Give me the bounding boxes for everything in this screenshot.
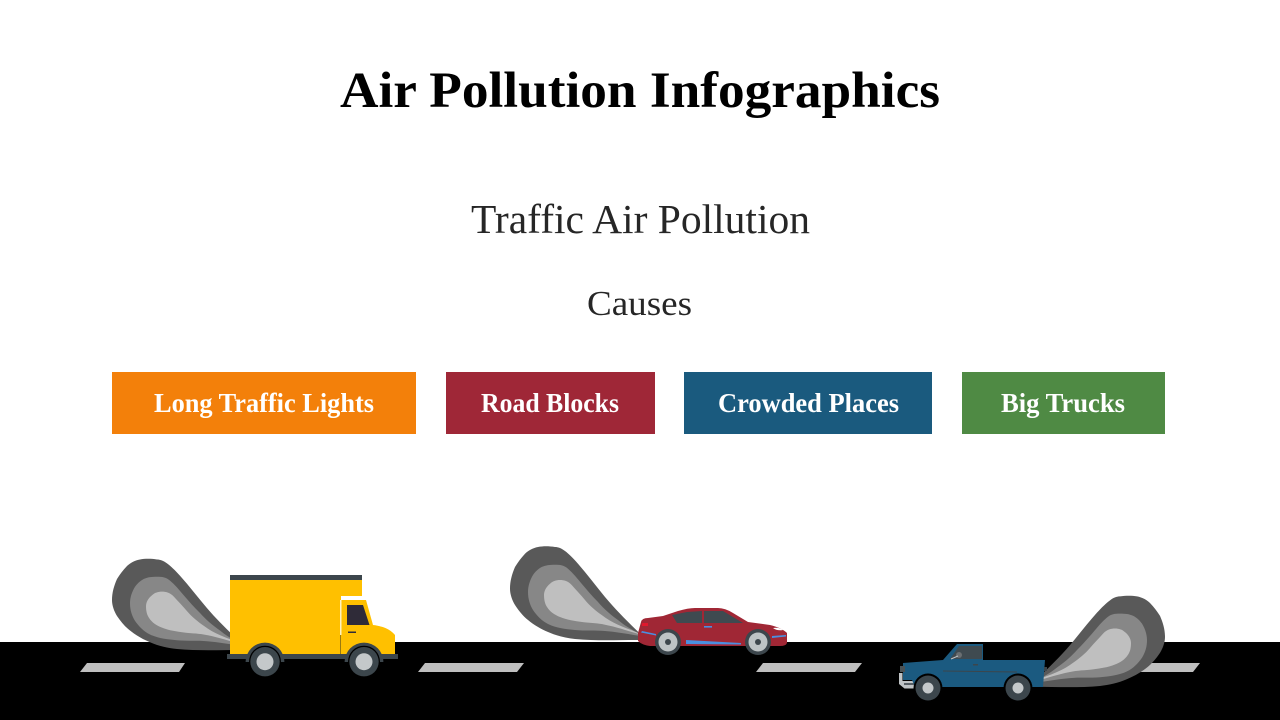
smoke cloud: truck <box>112 559 242 650</box>
heading: causes: Causes <box>587 284 692 323</box>
cause: crowded places: Crowded Places <box>718 388 899 418</box>
title: Air Pollution Infographics <box>340 63 940 119</box>
cause: road blocks <box>446 372 655 434</box>
icon: yellow truck <box>227 575 398 678</box>
road <box>0 642 1280 720</box>
cause: road blocks: Road Blocks <box>481 388 619 418</box>
smoke cloud: car <box>510 546 640 640</box>
cause: long traffic lights: Long Traffic Lights <box>154 388 374 418</box>
cause: big trucks <box>962 372 1165 434</box>
cause: crowded places <box>684 372 932 434</box>
cause: long traffic lights <box>112 372 416 434</box>
icon: red car <box>638 608 787 655</box>
smoke cloud: pickup <box>1035 596 1165 687</box>
icon: blue pickup <box>899 644 1047 702</box>
cause: big trucks: Big Trucks <box>1001 388 1125 418</box>
subtitle: traffic air pollution: Traffic Air Pollution <box>471 196 810 242</box>
